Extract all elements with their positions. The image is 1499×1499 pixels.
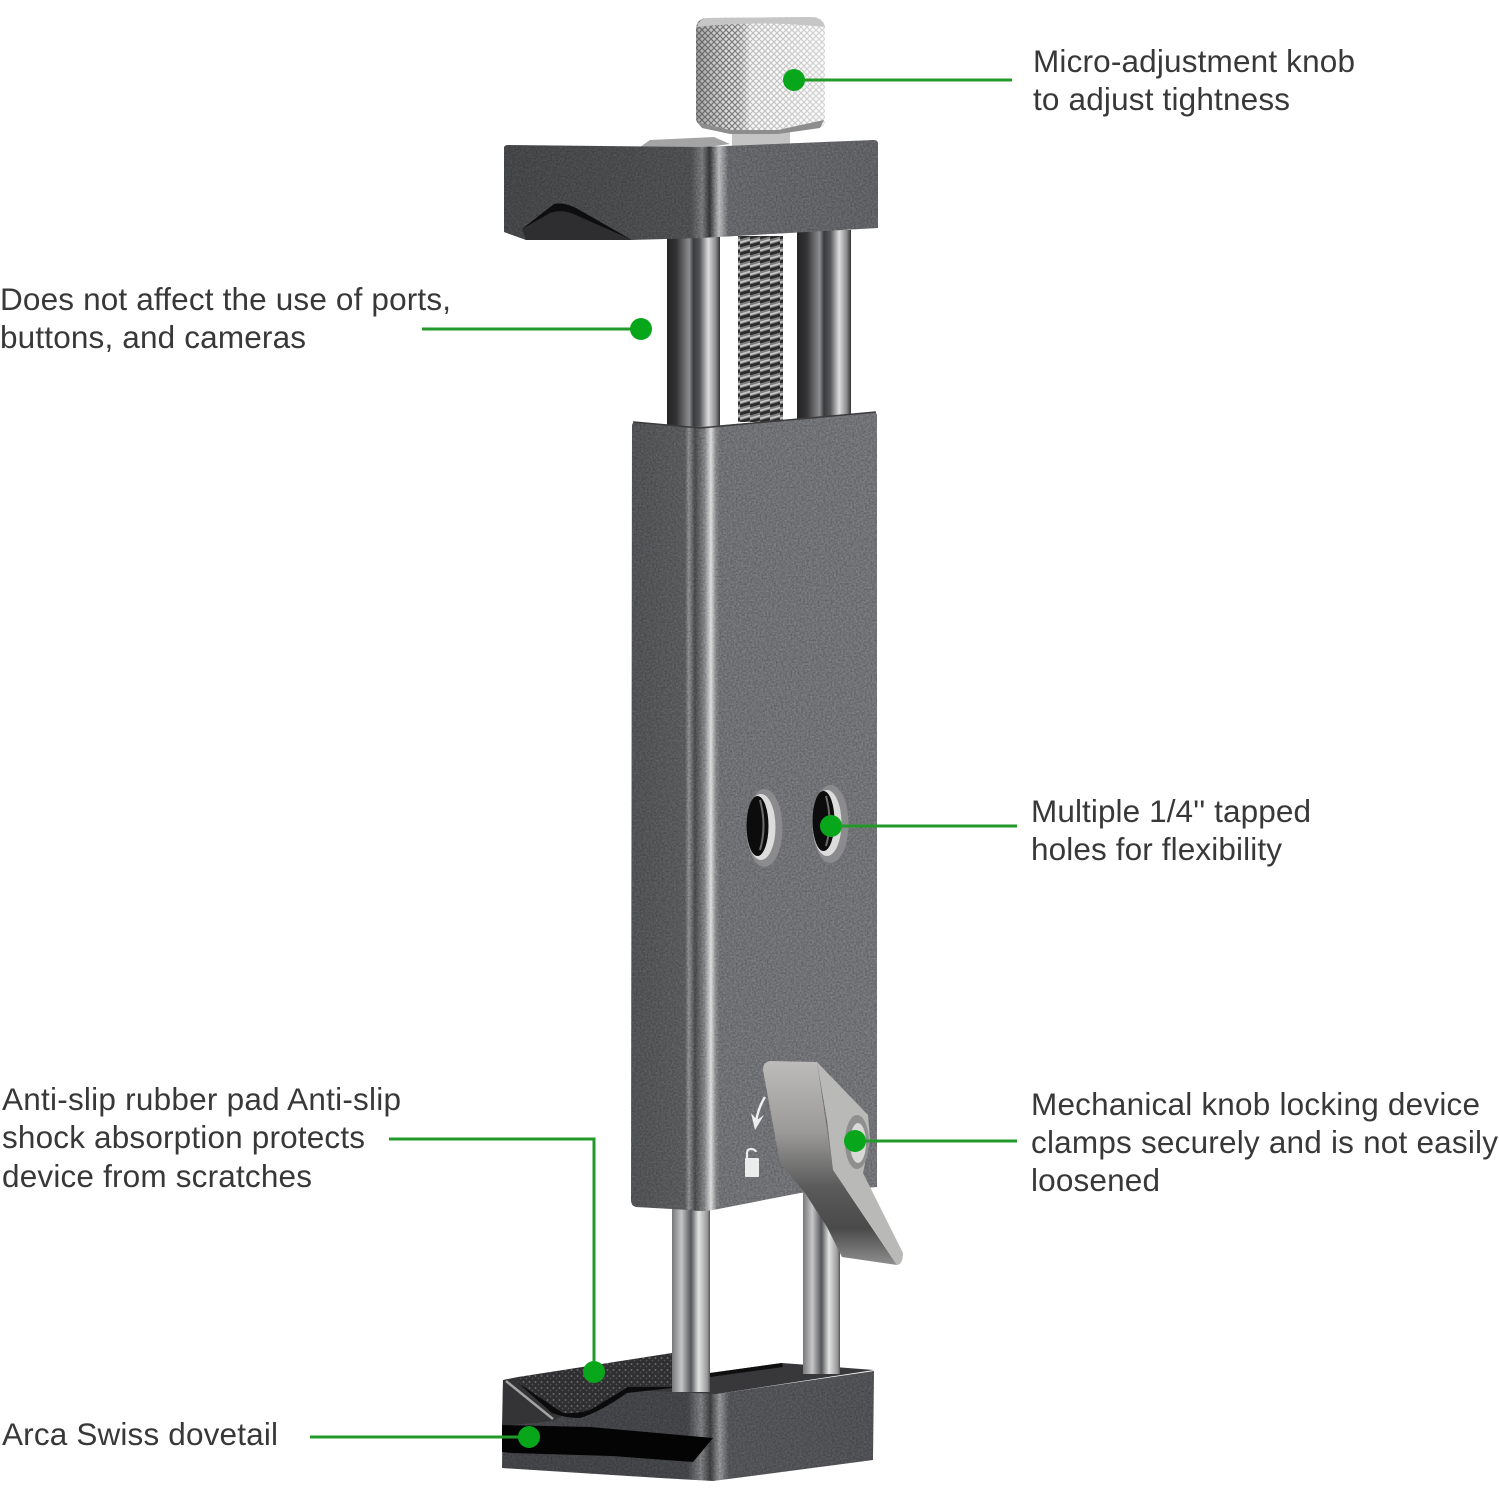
- clamp top highlight: [640, 137, 730, 148]
- main body: [631, 412, 877, 1211]
- callout: ports and cameras: buttons, and cameras: [0, 319, 306, 355]
- callout: rubber pad: shock absorption protects: [2, 1119, 365, 1155]
- callout: rubber pad: [2, 1081, 605, 1383]
- micro-adjustment knob: [696, 17, 825, 134]
- knob neck: [732, 130, 790, 147]
- lower rods: [672, 1190, 840, 1392]
- callout: ports and cameras: Does not affect the use of ports,: [0, 281, 451, 317]
- tapped hole right: [812, 785, 848, 863]
- bottom clamp jaw: [502, 1353, 874, 1481]
- callout: locking device: [844, 1086, 1498, 1198]
- callout: rubber pad: device from scratches: [2, 1158, 312, 1194]
- callout: tapped holes: Multiple 1/4'' tapped: [1031, 793, 1311, 829]
- anti-slip rubber pad: [518, 1353, 672, 1413]
- callout: micro-adjustment knob: Micro-adjustment knob: [1033, 43, 1355, 79]
- callout: tapped holes: holes for flexibility: [1031, 831, 1282, 867]
- callout: tapped holes: [820, 793, 1311, 867]
- locking lever: [763, 1061, 903, 1265]
- callout: dovetail: Arca Swiss dovetail: [2, 1416, 278, 1452]
- callout: locking device: loosened: [1031, 1162, 1160, 1198]
- callout: locking device: Mechanical knob locking device: [1031, 1086, 1480, 1122]
- icon: open padlock: [745, 1149, 759, 1177]
- bottom clamp top surface: [630, 1363, 874, 1394]
- callout: locking device: clamps securely and is not easily: [1031, 1124, 1498, 1160]
- dovetail slot: [502, 1425, 713, 1462]
- icon: unlock arrow: [751, 1097, 765, 1130]
- callout: rubber pad: Anti-slip rubber pad Anti-slip: [2, 1081, 401, 1117]
- callout: micro-adjustment knob: [783, 43, 1355, 117]
- callout: dovetail: [2, 1416, 540, 1452]
- callout: ports and cameras: [0, 281, 652, 355]
- callout: micro-adjustment knob: to adjust tightness: [1033, 81, 1290, 117]
- top clamp jaw: [504, 140, 878, 240]
- product: smartphone clamp: [502, 17, 903, 1481]
- tapped hole left: [746, 789, 782, 867]
- upper rods: [667, 230, 851, 430]
